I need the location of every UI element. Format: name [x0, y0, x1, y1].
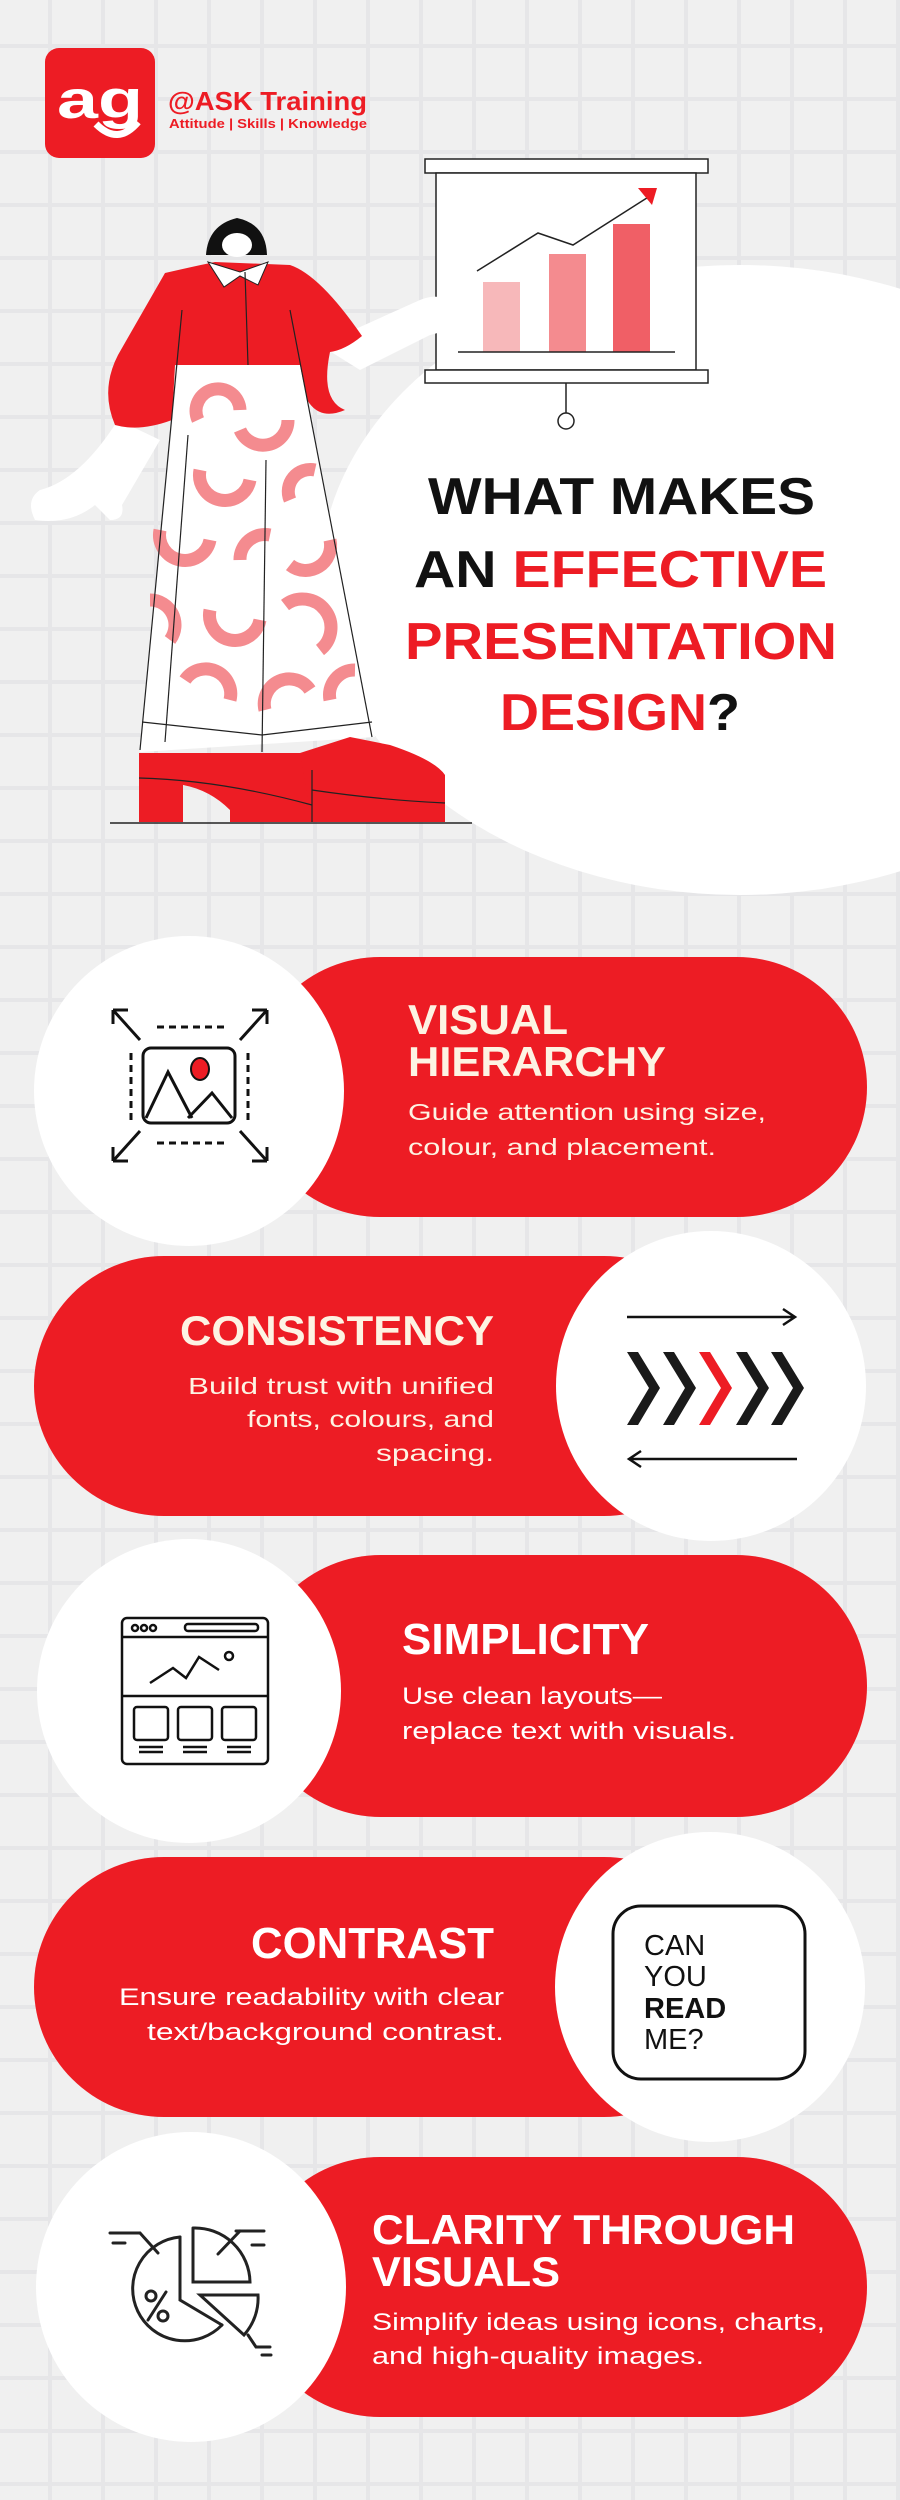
panel: visual hierarchy: Guide attention using size, [408, 1099, 766, 1125]
panel: contrast [34, 1832, 865, 2142]
icon: pie chart [110, 2228, 271, 2355]
illustration: presentation board [425, 159, 708, 429]
icon: can you read me box: CAN [644, 1930, 705, 1962]
icon: can you read me box: YOU [644, 1961, 707, 1993]
panel: visual hierarchy: HIERARCHY [408, 1038, 666, 1085]
panel: clarity through visuals: CLARITY THROUGH [372, 2206, 795, 2253]
panel: consistency: Build trust with unified [188, 1373, 494, 1399]
title: WHAT MAKES [428, 468, 815, 526]
logo: @ASK Training [168, 86, 367, 116]
panel: contrast: text/background contrast. [147, 2019, 504, 2046]
icon: can you read me box: READ [644, 1993, 726, 2025]
panel: simplicity: Use clean layouts— [402, 1683, 662, 1710]
title: AN EFFECTIVE [414, 541, 827, 599]
title: PRESENTATION [405, 613, 837, 671]
panel: visual hierarchy: VISUAL [408, 996, 568, 1043]
title: DESIGN? [500, 684, 740, 742]
panel: consistency: spacing. [376, 1440, 494, 1466]
panel: simplicity: replace text with visuals. [402, 1718, 736, 1745]
icon: arrows and chevrons [627, 1309, 804, 1467]
icon: browser layout [122, 1618, 268, 1764]
title [405, 468, 837, 742]
background white circle [320, 265, 900, 895]
icon: can you read me box [613, 1906, 805, 2079]
panel: consistency [34, 1231, 866, 1541]
logo [45, 48, 367, 158]
illustration: presenter woman [31, 218, 472, 823]
icon: can you read me box: ME? [644, 2024, 704, 2056]
logo: ag [57, 70, 143, 130]
panel: visual hierarchy: colour, and placement. [408, 1134, 716, 1160]
panel: clarity through visuals: Simplify ideas using icons, charts, [372, 2309, 825, 2336]
panel: clarity through visuals [36, 2132, 867, 2442]
logo: Attitude | Skills | Knowledge [169, 116, 367, 131]
panel: contrast: CONTRAST [251, 1919, 494, 1968]
panel: visual hierarchy [34, 936, 867, 1246]
panel: consistency: CONSISTENCY [180, 1307, 494, 1354]
panel: simplicity: SIMPLICITY [402, 1615, 649, 1664]
panel: clarity through visuals: VISUALS [372, 2248, 560, 2295]
panel: simplicity [37, 1539, 867, 1843]
panel: contrast: Ensure readability with clear [119, 1984, 504, 2011]
icon: expand image [113, 1010, 267, 1161]
panel: clarity through visuals: and high-quality images. [372, 2343, 704, 2370]
panel: consistency: fonts, colours, and [247, 1406, 494, 1432]
